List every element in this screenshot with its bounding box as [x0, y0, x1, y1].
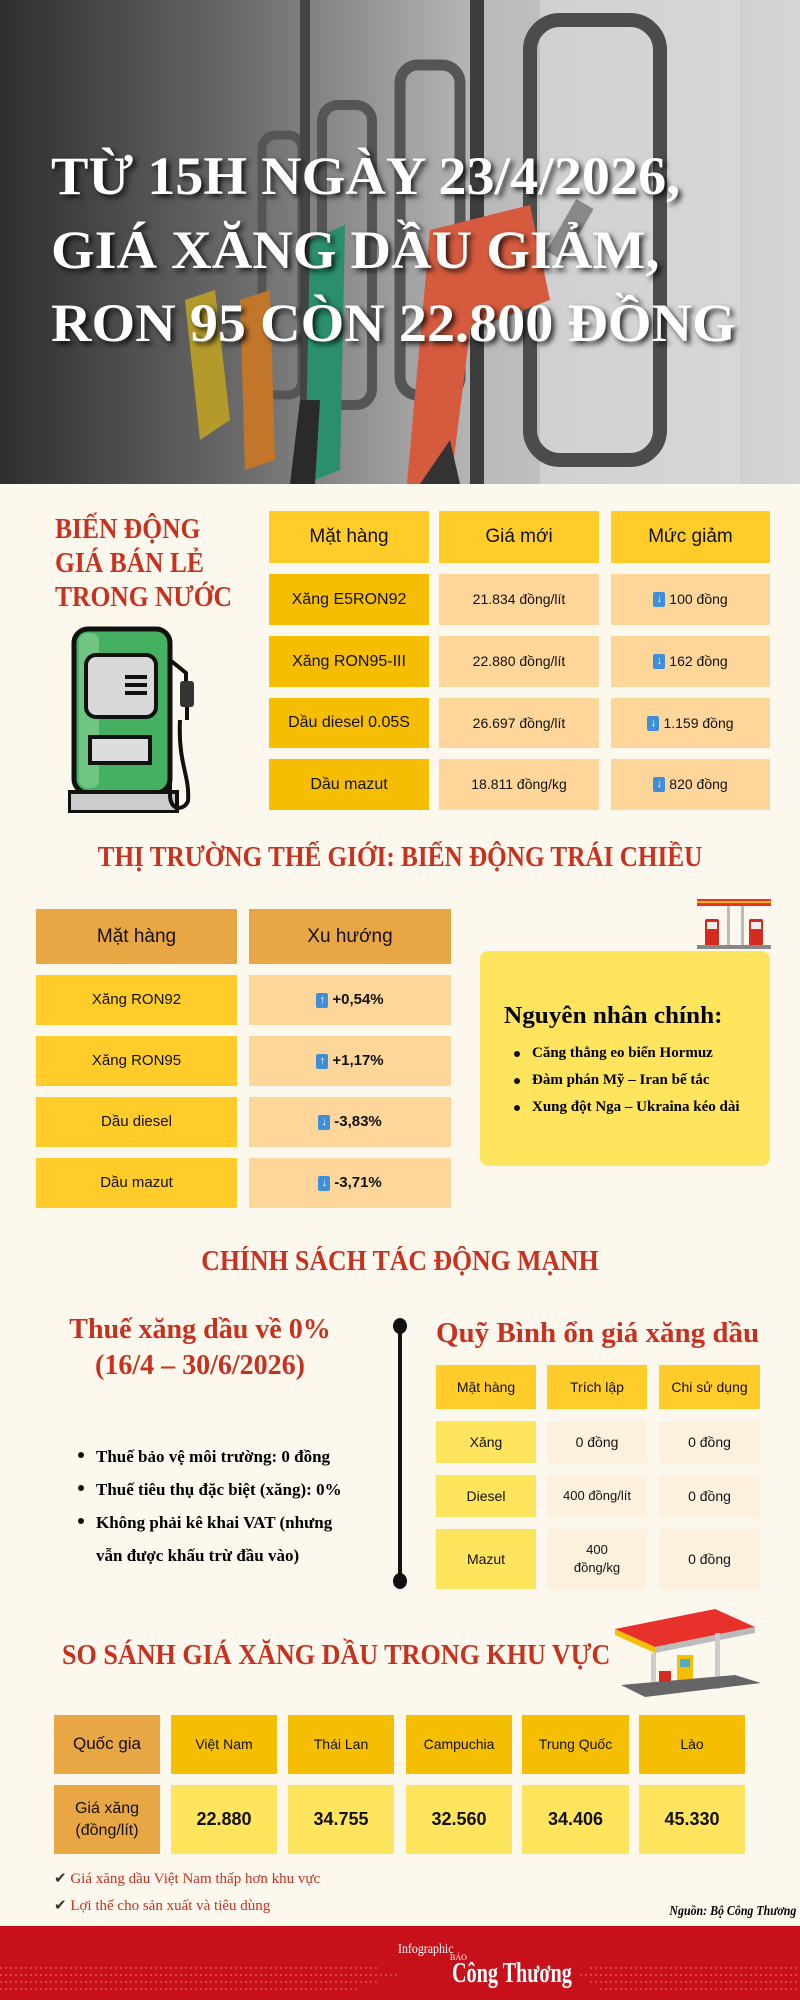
callout bullets: [514, 1045, 740, 1115]
table: giá bán lẻ trong nước: 26.697 đồng/lít: [473, 715, 565, 731]
table: quỹ bình ổn: [436, 1365, 760, 1589]
hero title: TỪ 15H NGÀY 23/4/2026,: [51, 146, 680, 206]
table: giá bán lẻ trong nước: Mức giảm: [648, 526, 733, 547]
table: quỹ bình ổn: Chi sử dụng: [671, 1379, 748, 1395]
tax bullets: Thuế tiêu thụ đặc biệt (xăng): 0%: [96, 1480, 342, 1499]
table: giá bán lẻ trong nước: 162 đồng: [669, 653, 728, 669]
panel: thuế xăng dầu: [69, 1314, 342, 1565]
table: so sánh khu vực: Trung Quốc: [539, 1736, 612, 1752]
table: giá bán lẻ trong nước: Dầu diesel 0.05S: [288, 714, 410, 731]
table: xu hướng thế giới: Dầu diesel: [101, 1113, 172, 1130]
table: xu hướng thế giới: ↑: [320, 1054, 325, 1066]
hero title: RON 95 CÒN 22.800 ĐỒNG: [51, 293, 736, 353]
icon: small gas station: [697, 899, 771, 949]
table: so sánh khu vực: [54, 1715, 745, 1854]
logo: báo công thương: [398, 1942, 572, 1989]
conclusions checklist: [54, 1871, 320, 1914]
table: quỹ bình ổn: 0 đồng: [688, 1551, 731, 1567]
table: giá bán lẻ trong nước: 18.811 đồng/kg: [471, 776, 567, 792]
heading: thuế 0%: Thuế xăng dầu về 0%: [69, 1314, 331, 1345]
hero title: [51, 146, 740, 353]
table: giá bán lẻ trong nước: Xăng RON95-III: [292, 653, 406, 670]
tax bullets: Không phải kê khai VAT (nhưng: [96, 1513, 332, 1532]
callout: nguyên nhân chính: [480, 951, 770, 1166]
table: giá bán lẻ trong nước: 820 đồng: [669, 776, 728, 792]
table: xu hướng thế giới: [36, 909, 451, 1208]
table: so sánh khu vực: 45.330: [664, 1809, 720, 1829]
table: quỹ bình ổn: Mazut: [467, 1551, 505, 1567]
table: quỹ bình ổn: 0 đồng: [688, 1488, 731, 1504]
logo: báo công thương: Công Thương: [452, 1958, 572, 1989]
table: giá bán lẻ trong nước: 100 đồng: [669, 591, 728, 607]
table: giá bán lẻ trong nước: Dầu mazut: [310, 776, 388, 793]
table: quỹ bình ổn: 0 đồng: [688, 1434, 731, 1450]
table: giá bán lẻ trong nước: ↓: [657, 593, 662, 605]
heading: thuế 0%: [69, 1314, 331, 1381]
table: so sánh khu vực: Giá xăng: [75, 1800, 139, 1817]
table: so sánh khu vực: Quốc gia: [73, 1734, 141, 1753]
table: xu hướng thế giới: +0,54%: [332, 991, 384, 1008]
table: giá bán lẻ trong nước: ↓: [657, 655, 662, 667]
table: so sánh khu vực: (đồng/lít): [75, 1822, 139, 1838]
section heading: biến động giá bán lẻ trong nước: TRONG NƯỚC: [55, 581, 232, 613]
section heading: thị trường thế giới: THỊ TRƯỜNG THẾ GIỚI: BIẾN ĐỘNG TRÁI CHIỀU: [98, 842, 702, 873]
table: quỹ bình ổn: Xăng: [470, 1434, 502, 1450]
conclusions checklist: ✔ Giá xăng dầu Việt Nam thấp hơn khu vực: [54, 1871, 320, 1887]
icon: green fuel pump: [68, 626, 194, 813]
section heading: biến động giá bán lẻ trong nước: GIÁ BÁN LẺ: [55, 547, 204, 579]
table: so sánh khu vực: Campuchia: [424, 1736, 494, 1752]
table: giá bán lẻ trong nước: Xăng E5RON92: [292, 591, 406, 608]
section heading: so sánh khu vực: SO SÁNH GIÁ XĂNG DẦU TRONG KHU VỰC: [62, 1639, 610, 1671]
table: so sánh khu vực: Lào: [680, 1736, 704, 1752]
tax bullets: Thuế bảo vệ môi trường: 0 đồng: [96, 1447, 330, 1466]
section heading: biến động giá bán lẻ trong nước: [55, 512, 232, 613]
table: xu hướng thế giới: ↓: [321, 1176, 327, 1188]
tax bullets: vẫn được khấu trừ đầu vào): [96, 1546, 299, 1565]
hero photo: fuel nozzles: [185, 0, 712, 484]
table: xu hướng thế giới: Xăng RON95: [92, 1052, 181, 1069]
table: giá bán lẻ trong nước: Mặt hàng: [309, 526, 389, 547]
heading: thuế 0%: (16/4 – 30/6/2026): [95, 1350, 305, 1381]
callout bullets: Xung đột Nga – Ukraina kéo dài: [532, 1099, 740, 1115]
table: so sánh khu vực: 32.560: [431, 1809, 487, 1829]
hero banner: [0, 0, 800, 484]
table: so sánh khu vực: Thái Lan: [314, 1736, 368, 1752]
table: xu hướng thế giới: -3,83%: [334, 1113, 382, 1130]
section heading: chính sách tác động mạnh: CHÍNH SÁCH TÁC ĐỘNG MẠNH: [201, 1246, 599, 1277]
heading: quỹ bình ổn: Quỹ Bình ổn giá xăng dầu: [436, 1317, 759, 1349]
table: xu hướng thế giới: +1,17%: [332, 1052, 384, 1069]
table: giá bán lẻ trong nước: [269, 511, 770, 810]
tax bullets: [78, 1447, 342, 1565]
table: quỹ bình ổn: Trích lập: [570, 1379, 624, 1395]
table: xu hướng thế giới: Xu hướng: [307, 926, 393, 947]
table: giá bán lẻ trong nước: ↓: [657, 778, 662, 790]
table: so sánh khu vực: 22.880: [196, 1809, 252, 1829]
table: quỹ bình ổn: 400: [586, 1542, 608, 1557]
icon: gas station canopy: [615, 1609, 761, 1697]
table: so sánh khu vực: Việt Nam: [195, 1736, 253, 1752]
table: quỹ bình ổn: đồng/kg: [574, 1560, 620, 1575]
table: xu hướng thế giới: ↓: [321, 1116, 327, 1128]
divider timeline: [393, 1318, 407, 1589]
table: xu hướng thế giới: Xăng RON92: [92, 991, 181, 1008]
logo: báo công thương: Infographic: [398, 1942, 454, 1957]
source note: Nguồn: Bộ Công Thương: [669, 1904, 796, 1919]
table: giá bán lẻ trong nước: ↓: [651, 716, 656, 728]
table: quỹ bình ổn: 400 đồng/lít: [563, 1488, 631, 1503]
section heading: biến động giá bán lẻ trong nước: BIẾN ĐỘNG: [55, 513, 200, 545]
hero title: GIÁ XĂNG DẦU GIẢM,: [51, 220, 659, 280]
table: xu hướng thế giới: ↑: [320, 994, 325, 1006]
footer band: [0, 1926, 800, 2000]
table: giá bán lẻ trong nước: 1.159 đồng: [663, 715, 734, 731]
table: quỹ bình ổn: Diesel: [467, 1488, 505, 1504]
callout bullets: Đàm phán Mỹ – Iran bế tắc: [532, 1072, 710, 1088]
callout bullets: Căng thẳng eo biển Hormuz: [532, 1045, 713, 1061]
table: so sánh khu vực: 34.755: [313, 1809, 369, 1829]
logo: báo công thương: BÁO: [450, 1953, 467, 1962]
table: quỹ bình ổn: 0 đồng: [576, 1434, 618, 1450]
table: giá bán lẻ trong nước: 21.834 đồng/lít: [473, 591, 565, 607]
table: giá bán lẻ trong nước: Giá mới: [485, 526, 553, 547]
table: xu hướng thế giới: -3,71%: [334, 1174, 382, 1191]
table: xu hướng thế giới: Dầu mazut: [100, 1174, 173, 1191]
conclusions checklist: ✔ Lợi thế cho sản xuất và tiêu dùng: [54, 1898, 270, 1914]
table: so sánh khu vực: 34.406: [548, 1809, 603, 1829]
table: xu hướng thế giới: Mặt hàng: [97, 926, 176, 947]
callout heading: Nguyên nhân chính:: [504, 1003, 722, 1029]
table: giá bán lẻ trong nước: 22.880 đồng/lít: [473, 653, 565, 669]
table: quỹ bình ổn: Mặt hàng: [457, 1379, 515, 1395]
